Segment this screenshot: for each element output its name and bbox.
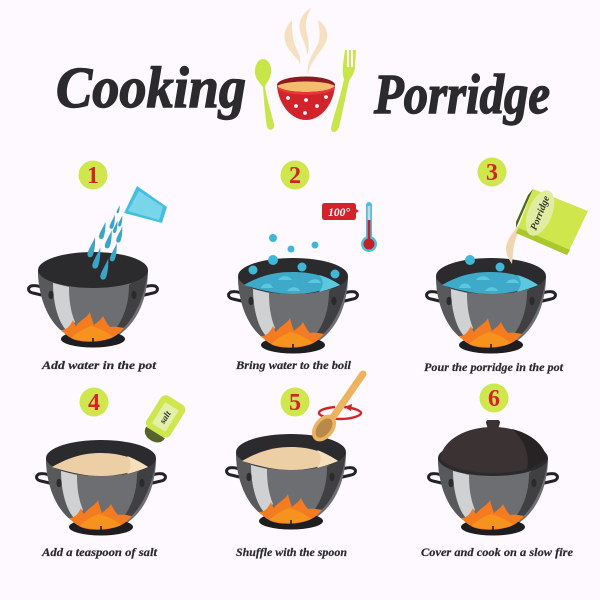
pot 5 [227, 434, 355, 530]
icon: thermometer [361, 202, 377, 252]
number badge 4 [80, 388, 108, 416]
step 1 [29, 160, 167, 372]
number badge 1: 1 [87, 163, 99, 189]
caption 5: Shuffle with the spoon [236, 545, 347, 559]
number badge 5: 5 [289, 390, 301, 416]
bubbles [248, 234, 340, 278]
water drops [87, 205, 122, 280]
pot 1 [29, 252, 157, 348]
caption 2: Bring water to the boil [235, 358, 352, 372]
heading: Porridge: Porridge [373, 64, 550, 126]
number badge 3: 3 [486, 160, 498, 186]
icon: steaming bowl with cutlery [255, 8, 356, 132]
step 3 [424, 158, 588, 374]
step 6 [421, 384, 574, 559]
bubbles [465, 255, 504, 272]
heading: Cooking: Cooking [56, 55, 246, 120]
number badge 2 [280, 160, 310, 190]
temperature tag: 100° [328, 207, 350, 219]
icon: pot lid [440, 420, 547, 473]
icon: steam [285, 8, 327, 75]
number badge 3 [478, 158, 506, 186]
icon: porridge box [516, 186, 588, 255]
icon: fork [331, 50, 356, 132]
icon: wooden spoon [307, 374, 363, 446]
icon: red bowl [277, 76, 335, 120]
porridge pour [506, 222, 523, 264]
number badge 1 [78, 160, 108, 190]
icon: salt shaker: salt [157, 409, 173, 426]
icon: porridge box: Porridge [529, 194, 553, 232]
icon: stirring arrow [319, 404, 361, 419]
icon: spoon [255, 59, 274, 130]
step 4 [37, 388, 188, 559]
pot 2 [229, 258, 357, 354]
temperature tag [322, 203, 359, 220]
caption 4: Add a teaspoon of salt [41, 545, 158, 559]
step 5 [227, 374, 363, 559]
pot 4 [37, 440, 165, 536]
title [56, 55, 550, 126]
number badge 6 [480, 384, 508, 412]
number badge 5 [280, 388, 310, 416]
icon: salt shaker [139, 393, 188, 448]
number badge 4: 4 [88, 390, 100, 416]
caption 1: Add water in the pot [41, 358, 157, 372]
number badge 2: 2 [289, 163, 301, 189]
caption 3: Pour the porridge in the pot [424, 360, 564, 374]
number badge 6: 6 [488, 386, 500, 412]
icon: water glass [124, 186, 167, 223]
step 2 [229, 160, 377, 372]
caption 6: Cover and cook on a slow fire [421, 545, 574, 559]
pot 3 [427, 258, 555, 354]
pot 6 [429, 440, 557, 536]
